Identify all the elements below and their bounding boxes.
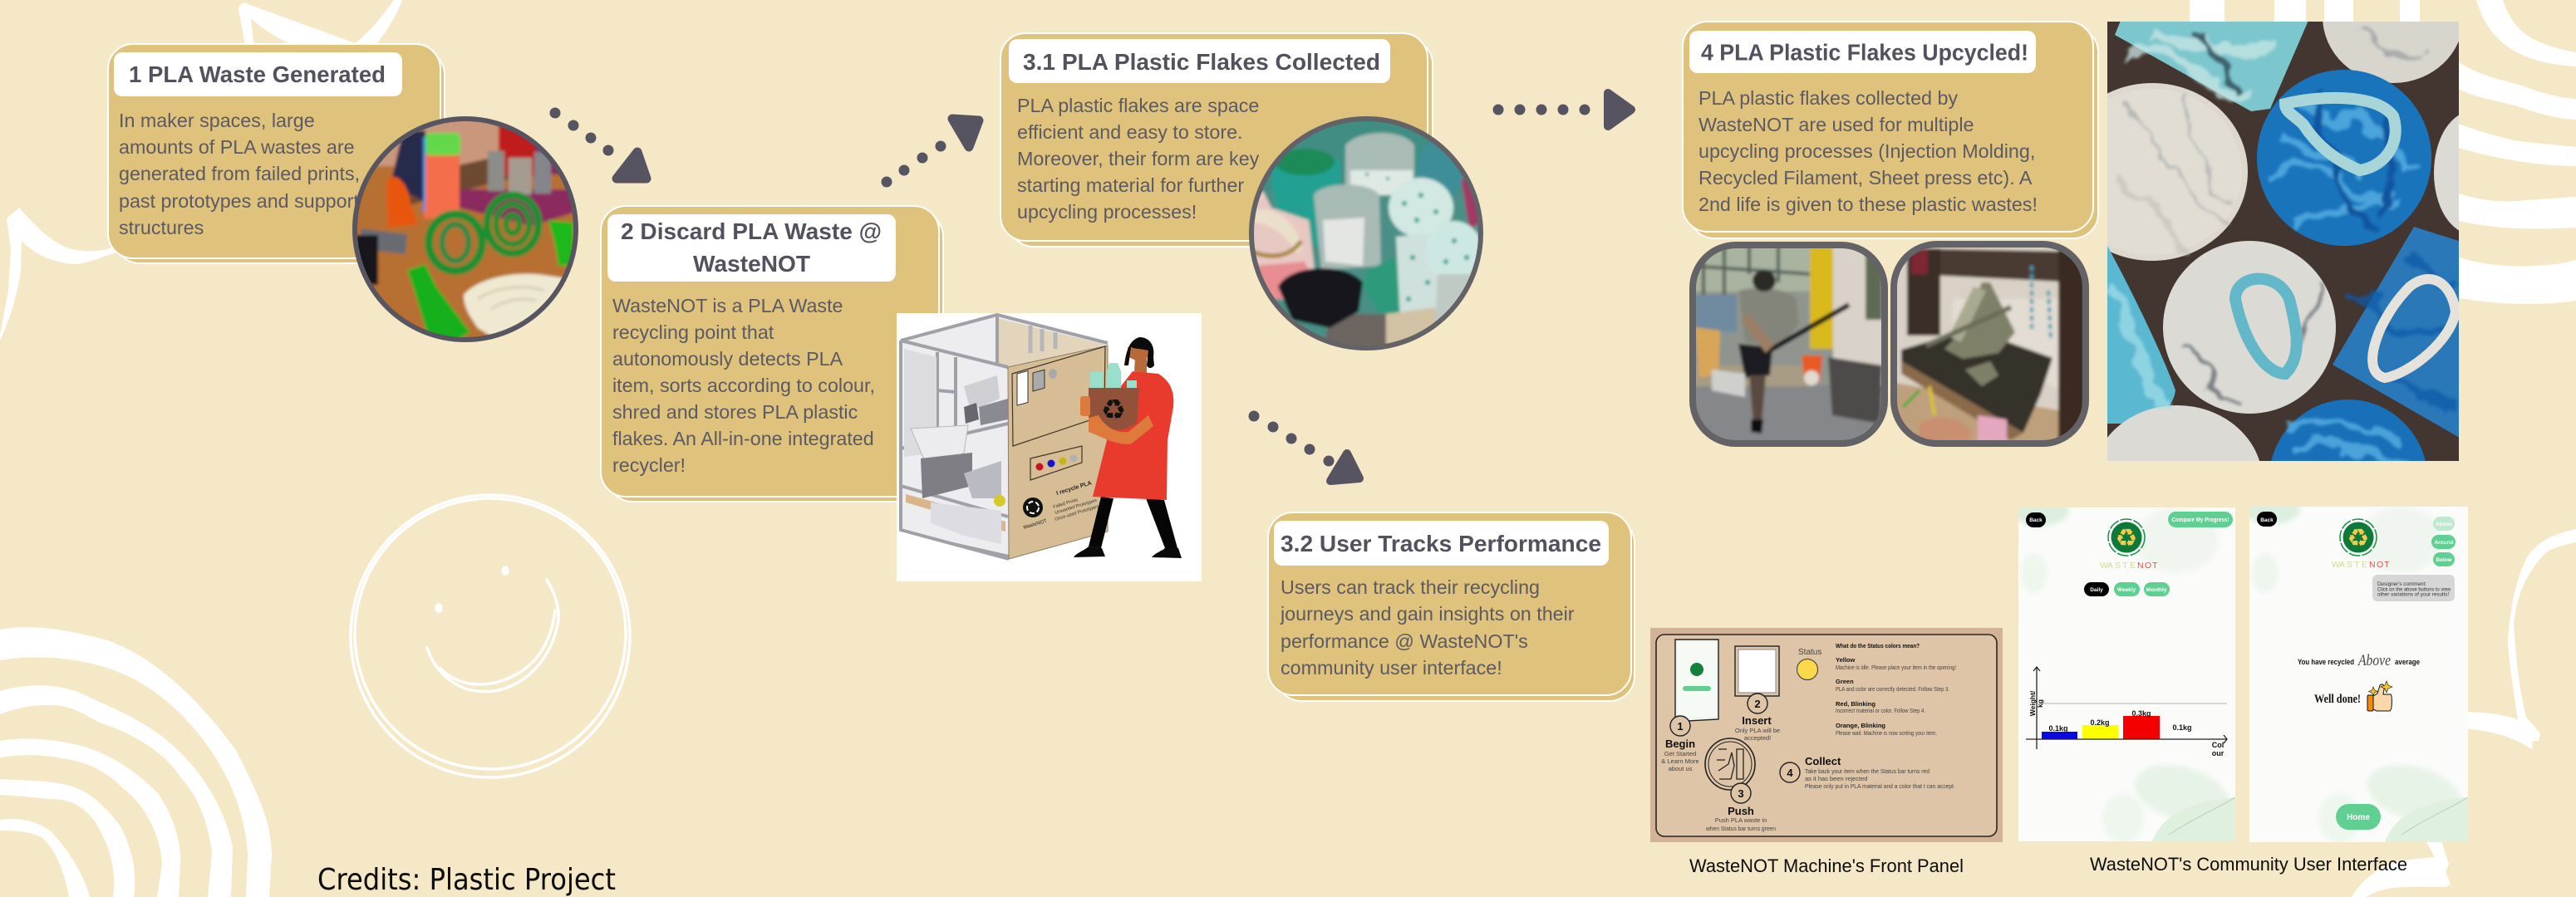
designer comment: Click on the above buttons to view <box>2377 586 2451 593</box>
text: step 3.1 description: Moreover, their form are key <box>1017 148 1260 169</box>
text: step 3.2 description: performance @ WasteNOT's <box>1281 630 1528 652</box>
text: step 4 description: upcycling processes (Injection Molding, <box>1698 140 2035 162</box>
decorative smiley face sketch <box>351 495 630 777</box>
bar chart: weight by colour: 0.1kg <box>2172 723 2192 732</box>
text: step 1 description: structures <box>119 217 204 238</box>
status light and legend: Machine is idle. Please place your item in the opening! <box>1836 664 1956 671</box>
panel: step 4 PLA plastic flakes upcycled <box>1683 22 2098 238</box>
text: step 2 description: flakes. An All-in-one integrated <box>612 428 874 449</box>
plate inserts <box>2235 98 2456 378</box>
photo: man operating sheet press <box>1689 242 1888 448</box>
panel step: begin: 1 <box>1677 720 1684 733</box>
status light and legend: What do the Status colors mean? <box>1836 642 1920 649</box>
machine front panel: WasteNOT <box>1023 518 1048 531</box>
panel step: insert: 2 <box>1754 698 1761 710</box>
icon: recycling symbol on bag: ♻ <box>1101 394 1126 427</box>
machine <box>901 315 1108 559</box>
status light and legend: Yellow <box>1836 656 1856 664</box>
photo: sheet press with scissor jack <box>1890 241 2089 447</box>
panel: step 1 PLA waste generated <box>108 44 445 263</box>
illustration: WasteNOT machine with person <box>897 313 1202 581</box>
heading: step 3.1: 3.1 PLA Plastic Flakes Collected <box>1023 49 1380 75</box>
home button <box>2336 804 2381 830</box>
bar chart: weight by colour: 0.3kg <box>2131 709 2151 718</box>
text: step 4 description: Recycled Filament, Sheet press etc). A <box>1698 167 2033 189</box>
caption: front panel: WasteNOT Machine's Front Panel <box>1689 855 1964 876</box>
bar chart: weight by colour: kg <box>2036 699 2044 708</box>
panel step: push <box>1705 738 1776 832</box>
panel: step 3.1 PLA plastic flakes collected <box>1000 33 1433 247</box>
photo: jars of PLA flakes <box>1246 116 1487 353</box>
heading: step 1 <box>114 52 402 96</box>
period buttons <box>2084 582 2170 596</box>
heading: step 3.2: 3.2 User Tracks Performance <box>1281 531 1601 556</box>
result sentence: average <box>2395 658 2420 667</box>
caption: community UI: WasteNOT's Community User Interface <box>2090 854 2407 875</box>
machine front panel: Failed Prints <box>1053 498 1079 510</box>
compare button: Compare My Progress! <box>2172 516 2229 523</box>
image: WasteNOT machine front panel <box>1650 628 2003 842</box>
text: step 1 description: In maker spaces, large <box>119 110 315 131</box>
panel step: begin: Begin <box>1665 738 1695 750</box>
status light and legend: Please wait. Machine is now sorting your item. <box>1836 729 1937 737</box>
logo: WasteNOT: ♻ <box>2347 524 2369 553</box>
back button <box>2257 512 2277 527</box>
designer comment: Designer's comment: <box>2377 581 2426 587</box>
text: step 4 description: PLA plastic flakes collected by <box>1698 87 1958 109</box>
logo: WasteNOT: NOT <box>2369 560 2390 570</box>
designer comment <box>2372 575 2455 601</box>
arrow: step 1 to step 2 <box>550 108 646 179</box>
text: step 3.2 description: journeys and gain insights on their <box>1280 603 1575 625</box>
panel step: collect: Collect <box>1805 755 1841 767</box>
status light and legend: PLA and color are correctly detected. Follow Step 3. <box>1836 685 1949 693</box>
logo: WasteNOT: WASTE <box>2100 561 2136 571</box>
bar chart: weight by colour: Col <box>2212 741 2224 749</box>
text: step 4 description: WasteNOT are used for multiple <box>1698 114 1974 135</box>
text: step 3.2 description: community user interface! <box>1281 657 1502 679</box>
text: step 2 description: recycling point that <box>612 321 774 343</box>
arrow: step 3.1 to step 3.2 <box>1248 410 1359 481</box>
photo: 3D printed PLA objects <box>353 116 578 345</box>
panel step: collect: 4 <box>1787 767 1793 779</box>
heading: step 2: WasteNOT <box>693 251 810 277</box>
text: step 1 description: past prototypes and support <box>119 190 359 212</box>
designer comment: other variations of your results! <box>2377 591 2449 598</box>
status light and legend: Incorrect material or color. Follow Step 4. <box>1836 707 1925 714</box>
logo: WasteNOT: WASTE <box>2332 560 2367 570</box>
panel step: insert: Insert <box>1742 714 1772 727</box>
back button: Back <box>2029 517 2043 523</box>
panel step: begin: about us <box>1669 765 1693 772</box>
period buttons: Daily <box>2090 587 2103 593</box>
panel step: collect: Take back your item when the Status bar turns red <box>1805 767 1930 775</box>
text: step 2 description: recycler! <box>612 454 686 476</box>
result sentence <box>2298 652 2420 669</box>
back button <box>2026 512 2046 527</box>
text: step 3.1 description: PLA plastic flakes are space <box>1017 95 1259 116</box>
logo: WasteNOT <box>2100 519 2158 571</box>
result sentence: Above <box>2357 652 2391 669</box>
screen: community UI progress chart <box>2011 496 2235 843</box>
panel step: collect: as it has been rejected <box>1805 775 1867 782</box>
status light and legend: Red, Blinking <box>1836 700 1875 708</box>
compare button <box>2168 512 2233 527</box>
panel step: push: Push <box>1728 805 1754 817</box>
text: step 1 description: amounts of PLA wastes are <box>119 136 355 158</box>
person carrying recycling bag <box>1074 337 1182 558</box>
heading: step 4: 4 PLA Plastic Flakes Upcycled! <box>1701 40 2028 65</box>
heading: step 4 <box>1689 31 2036 73</box>
bar chart: weight by colour <box>2026 667 2227 757</box>
text: step 3.1 description: upcycling processes! <box>1017 201 1197 223</box>
home button: Home <box>2347 813 2370 822</box>
logo: WasteNOT <box>2332 519 2390 570</box>
arrow: step 3.1 to step 4 <box>1492 93 1631 126</box>
panel step: insert: accepted! <box>1744 734 1771 742</box>
text: step 1 description: generated from failed prints, <box>119 163 360 184</box>
bar chart: weight by colour: Weight/ <box>2028 690 2037 716</box>
period buttons: Weekly <box>2117 587 2136 593</box>
panel step: collect <box>1780 755 1954 790</box>
machine front panel <box>1008 346 1108 559</box>
comparison buttons: Around <box>2434 540 2454 546</box>
photo: upcycled marbled plastic plates <box>2107 22 2459 461</box>
status light and legend <box>1797 642 1956 737</box>
heading: step 1: 1 PLA Waste Generated <box>129 61 386 87</box>
status light and legend: Status <box>1798 648 1821 657</box>
result sentence: You have recycled <box>2298 658 2354 667</box>
icon: thumbs up with sparkles <box>2367 681 2392 711</box>
back button: Back <box>2260 517 2274 523</box>
status light and legend: Green <box>1836 678 1854 685</box>
bar chart: weight by colour: 0.2kg <box>2090 718 2110 727</box>
well done message: Well done! <box>2314 693 2361 706</box>
panel step: begin: Get Started <box>1664 750 1696 757</box>
panel step: push: 3 <box>1738 787 1744 800</box>
comparison buttons: Above <box>2436 522 2452 527</box>
panel step: collect: Please only put in PLA material and a color that I can accept <box>1805 782 1954 790</box>
text: step 4 description: 2nd life is given to these plastic wastes! <box>1698 194 2038 215</box>
logo: WasteNOT: ♻ <box>2116 524 2137 553</box>
panel: step 3.2 user tracks performance <box>1268 512 1635 701</box>
screen: community UI comparison result <box>2242 494 2468 843</box>
panel step: begin <box>1661 640 1718 772</box>
heading: step 3.1 <box>1009 39 1390 83</box>
text: step 3.2 description: Users can track their recycling <box>1281 576 1540 598</box>
comparison buttons: Below <box>2436 557 2453 563</box>
machine front panel: Unwanted Prototypes <box>1054 498 1098 516</box>
machine front panel: I recycle PLA <box>1056 480 1093 497</box>
panel step: push: Push PLA waste in <box>1715 816 1767 824</box>
credits: Credits: Plastic Project <box>317 863 616 897</box>
logo: WasteNOT: NOT <box>2137 561 2158 571</box>
heading: step 2: 2 Discard PLA Waste @ <box>621 218 882 244</box>
text: step 2 description: autonomously detects PLA <box>612 348 843 370</box>
bar chart: weight by colour: 0.1kg <box>2048 724 2068 733</box>
panel step: insert: Only PLA will be <box>1735 727 1780 734</box>
machine front panel: Once-used Prototypes <box>1054 504 1099 522</box>
period buttons: Monthly <box>2146 587 2167 593</box>
text: step 2 description: item, sorts according to colour, <box>612 375 875 396</box>
text: step 3.1 description: starting material for further <box>1017 174 1244 196</box>
panel: step 2 discard PLA waste <box>601 206 943 502</box>
text: step 2 description: WasteNOT is a PLA Waste <box>612 295 843 316</box>
panel step: begin: & Learn More <box>1661 757 1699 765</box>
panel step: push: when Status bar turns green <box>1705 825 1776 832</box>
status light and legend: Orange, Blinking <box>1836 722 1885 729</box>
heading: step 2 <box>607 214 896 282</box>
heading: step 3.2 <box>1274 521 1609 566</box>
panel step: insert <box>1735 646 1780 742</box>
arrow: step 2 to step 3.1 <box>881 119 979 188</box>
text: step 3.1 description: efficient and easy to store. <box>1017 121 1243 143</box>
text: step 2 description: shred and stores PLA plastic <box>612 401 858 423</box>
comparison buttons <box>2431 517 2456 566</box>
bar chart: weight by colour: our <box>2212 749 2225 757</box>
